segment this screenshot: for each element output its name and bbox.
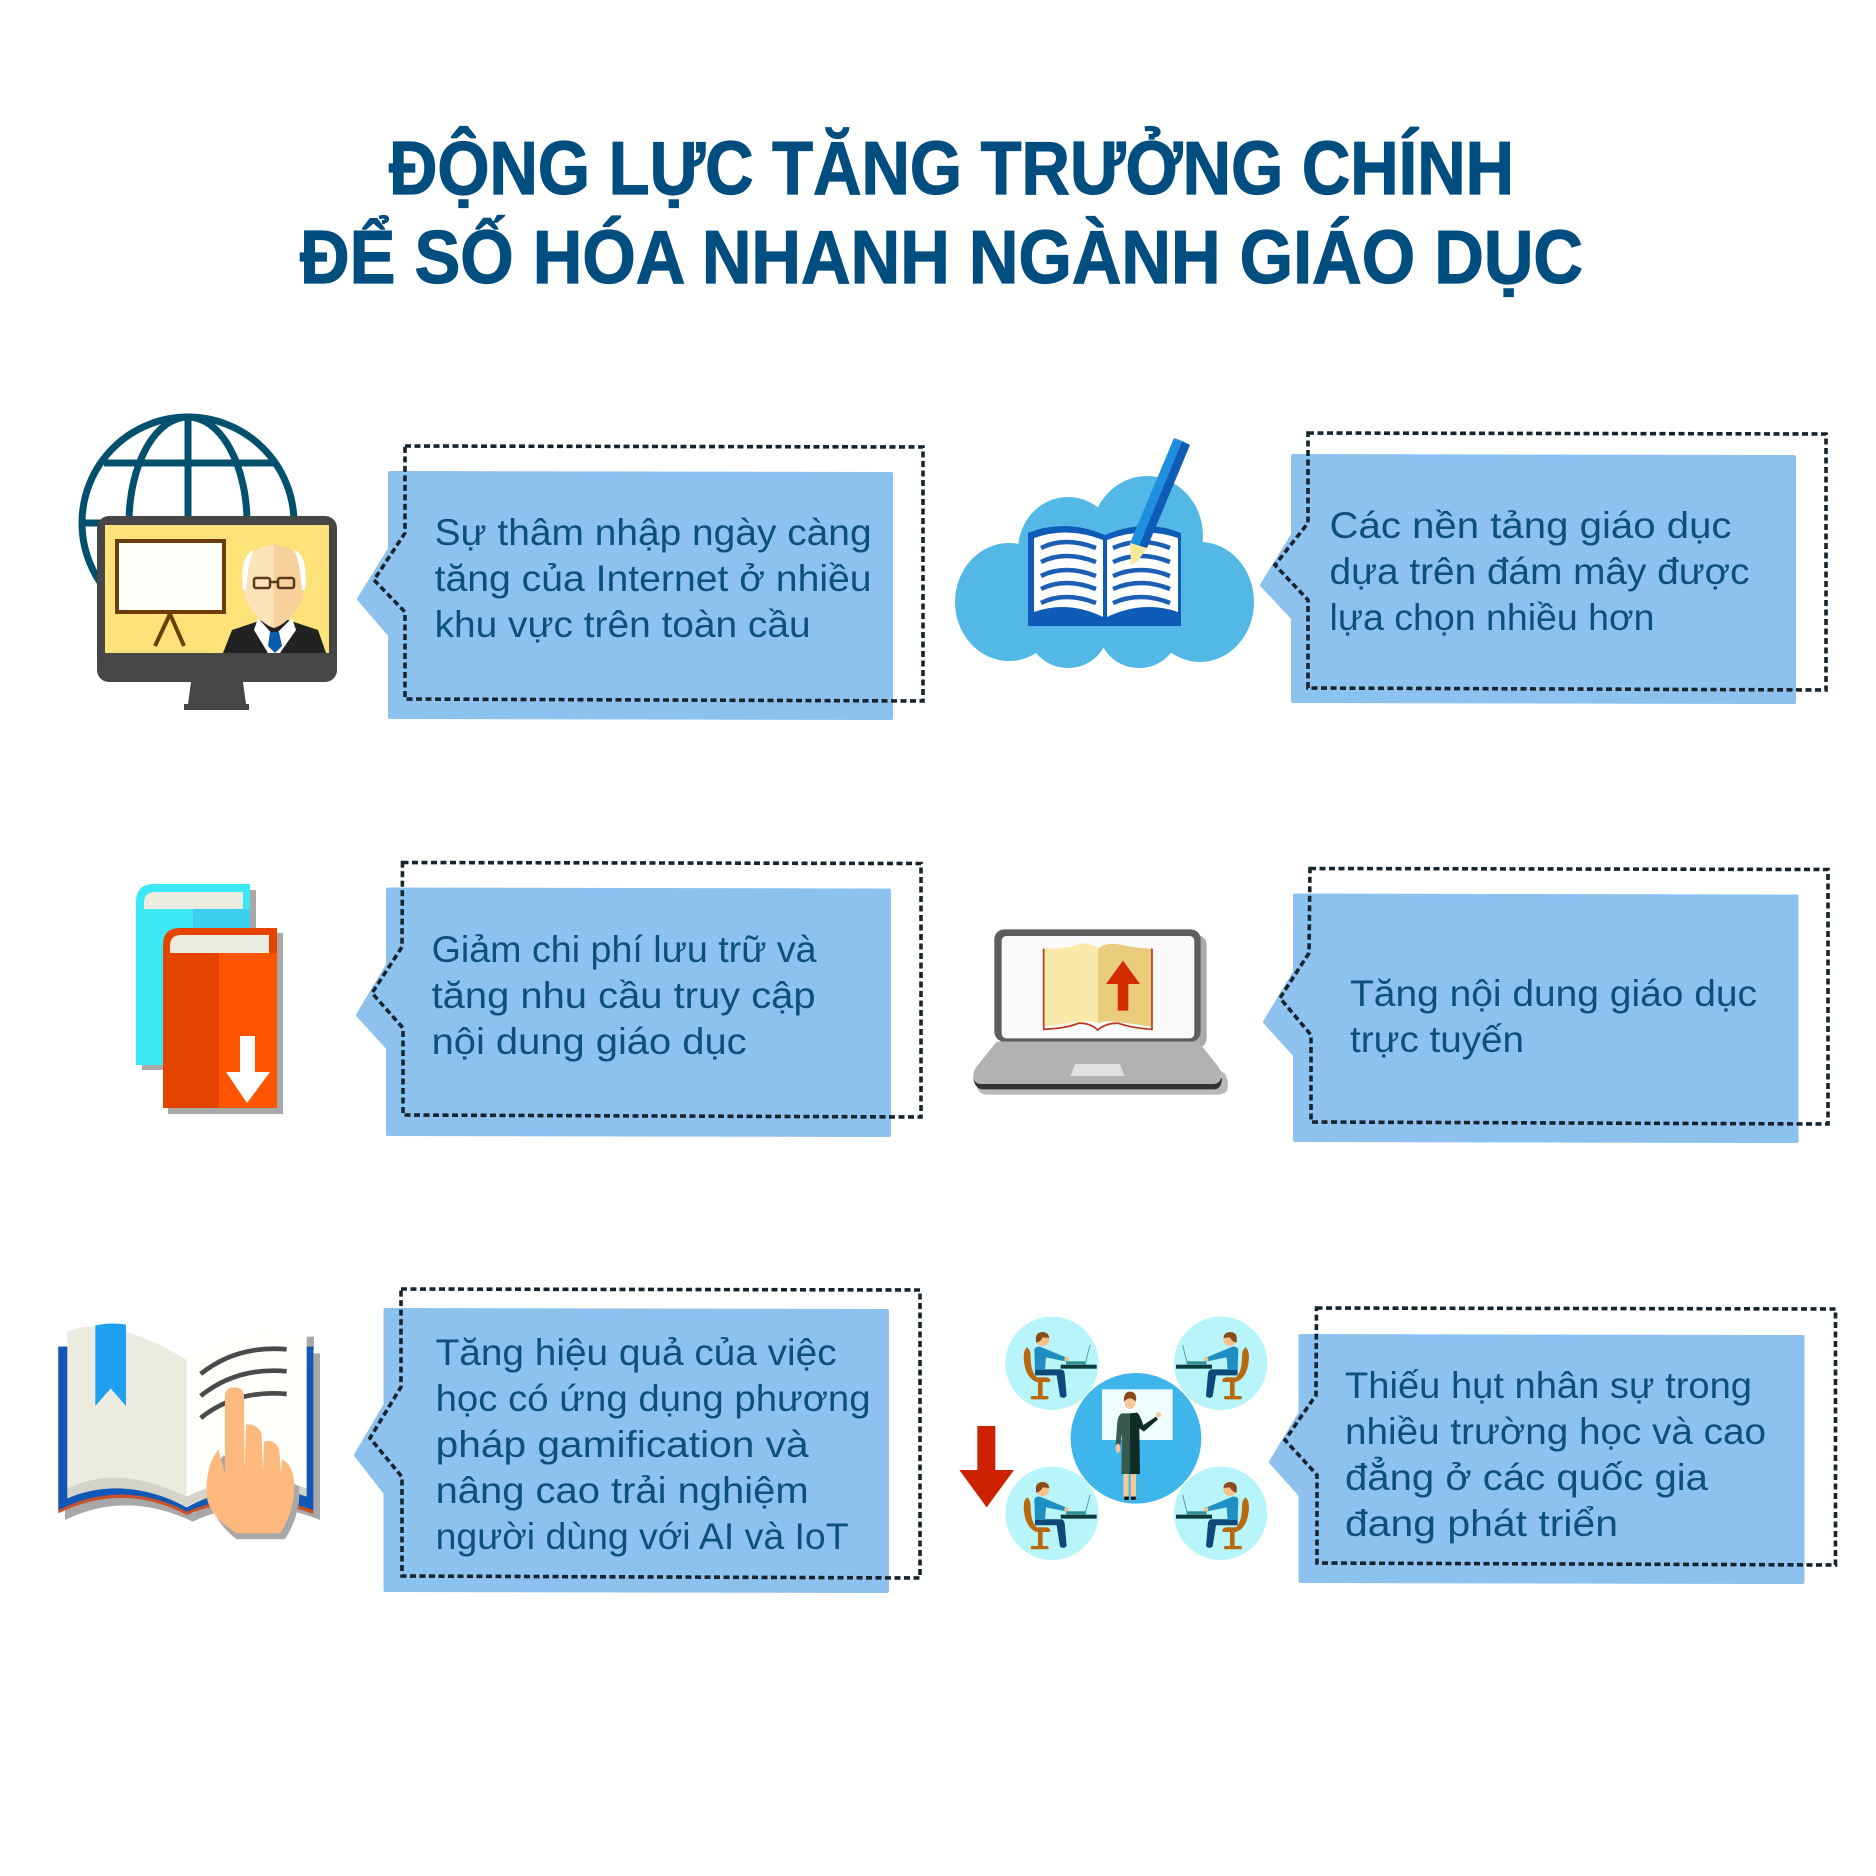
icon: stacked books with download arrow (136, 884, 283, 1114)
panel 3: storage cost: nội dung giáo dục (432, 1021, 747, 1062)
icon: teacher and four students with down arrow (959, 1317, 1267, 1560)
panel 3: storage cost: tăng nhu cầu truy cập (432, 975, 816, 1016)
panel 1: internet penetration: khu vực trên toàn cầu (435, 604, 811, 645)
title (300, 126, 1583, 299)
icon: open book with pointing hand (58, 1323, 320, 1539)
panel 1: internet penetration: Sự thâm nhập ngày càng (435, 512, 872, 553)
panel 6: staff shortage: đang phát triển (1345, 1503, 1618, 1544)
panel 4: online content: Tăng nội dung giáo dục (1350, 973, 1757, 1014)
panel 6: staff shortage: nhiều trường học và cao (1345, 1411, 1766, 1452)
panel 5: gamification (356, 1289, 920, 1591)
panel 4: online content: trực tuyến (1350, 1019, 1524, 1060)
panel 6: staff shortage: đẳng ở các quốc gia (1345, 1456, 1708, 1498)
panel 3: storage cost: Giảm chi phí lưu trữ và (432, 929, 817, 970)
panel 5: gamification: người dùng với AI và IoT (436, 1516, 849, 1557)
panel 5: gamification: nâng cao trải nghiệm (436, 1470, 809, 1511)
panel 5: gamification: pháp gamification và (436, 1424, 809, 1465)
icon: cloud with open book and pencil (955, 438, 1254, 668)
panel 2: cloud platforms (1262, 433, 1826, 702)
panel 2: cloud platforms: Các nền tảng giáo dục (1330, 505, 1732, 546)
icon: laptop with book and upload arrow (973, 929, 1228, 1095)
panel 1: internet penetration: tăng của Internet ở nhiều (435, 558, 872, 599)
panel 1: internet penetration (359, 446, 923, 718)
panel 3: storage cost (358, 862, 921, 1135)
panel 5: gamification: học có ứng dụng phương (436, 1378, 871, 1419)
panel 6: staff shortage: Thiếu hụt nhân sự trong (1345, 1365, 1752, 1406)
panel 6: staff shortage (1271, 1308, 1836, 1582)
panel 2: cloud platforms: dựa trên đám mây được (1330, 551, 1750, 592)
panel 5: gamification: Tăng hiệu quả của việc (436, 1332, 837, 1373)
title: ĐỂ SỐ HÓA NHANH NGÀNH GIÁO DỤC (300, 215, 1583, 299)
panel 2: cloud platforms: lựa chọn nhiều hơn (1330, 597, 1654, 638)
icon: globe and monitor with presenter (82, 417, 337, 710)
panel 4: online content (1265, 868, 1828, 1141)
title: ĐỘNG LỰC TĂNG TRƯỞNG CHÍNH (389, 126, 1514, 210)
